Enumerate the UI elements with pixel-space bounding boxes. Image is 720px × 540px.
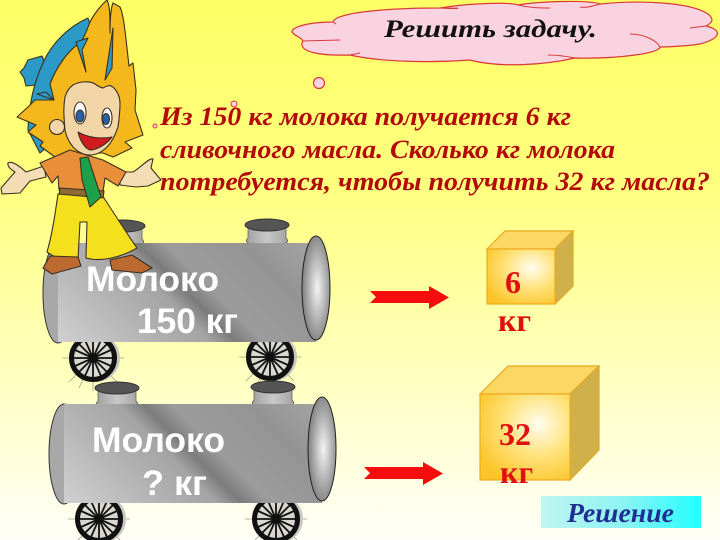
shoes [43, 256, 81, 274]
butter cube 6 kg [487, 231, 573, 338]
thought bubble circles [153, 78, 324, 128]
solution button: Решение [566, 498, 674, 528]
tank 1: milk 150 kg: Молоко [86, 260, 219, 299]
yellow hair [17, 0, 143, 157]
arrow 1 [370, 286, 449, 309]
ear [50, 120, 64, 134]
butter cube 6 kg: кг [498, 302, 531, 338]
arrow 2 [364, 462, 443, 485]
shirt [40, 150, 126, 192]
belt [59, 188, 104, 199]
butter cube 32 kg: 32 [499, 416, 531, 452]
butter cube 32 kg [480, 366, 599, 490]
mouth [78, 132, 112, 150]
problem text: сливочного масла. Сколько кг молока [160, 135, 615, 164]
blue hair tuft [20, 56, 46, 86]
problem text: потребуется, чтобы получить 32 кг масла? [160, 167, 710, 196]
butter cube 6 kg: 6 [505, 264, 521, 300]
trousers [47, 194, 137, 261]
tank 2: milk unknown kg: Молоко [92, 421, 225, 460]
solution button [541, 496, 701, 528]
problem text: Из 150 кг молока получается 6 кг [159, 102, 571, 131]
blue hair back [28, 18, 95, 153]
left arm and hand [1, 162, 46, 194]
head [64, 82, 120, 155]
blue hair stripes [37, 28, 113, 100]
problem text [159, 102, 710, 196]
character: boy with yellow hair [1, 0, 161, 274]
eyes [74, 102, 86, 124]
right arm and hand [120, 159, 161, 187]
tank 2: milk unknown kg: ? кг [142, 464, 207, 503]
butter cube 32 kg: кг [500, 454, 533, 490]
speech cloud: title [292, 1, 717, 65]
tie [80, 157, 101, 207]
tank 2: milk unknown kg [49, 381, 336, 540]
cloud heading: Решить задачу. [383, 16, 597, 43]
tank 1: milk 150 kg: 150 кг [137, 302, 238, 341]
tank 1: milk 150 kg [43, 219, 330, 391]
